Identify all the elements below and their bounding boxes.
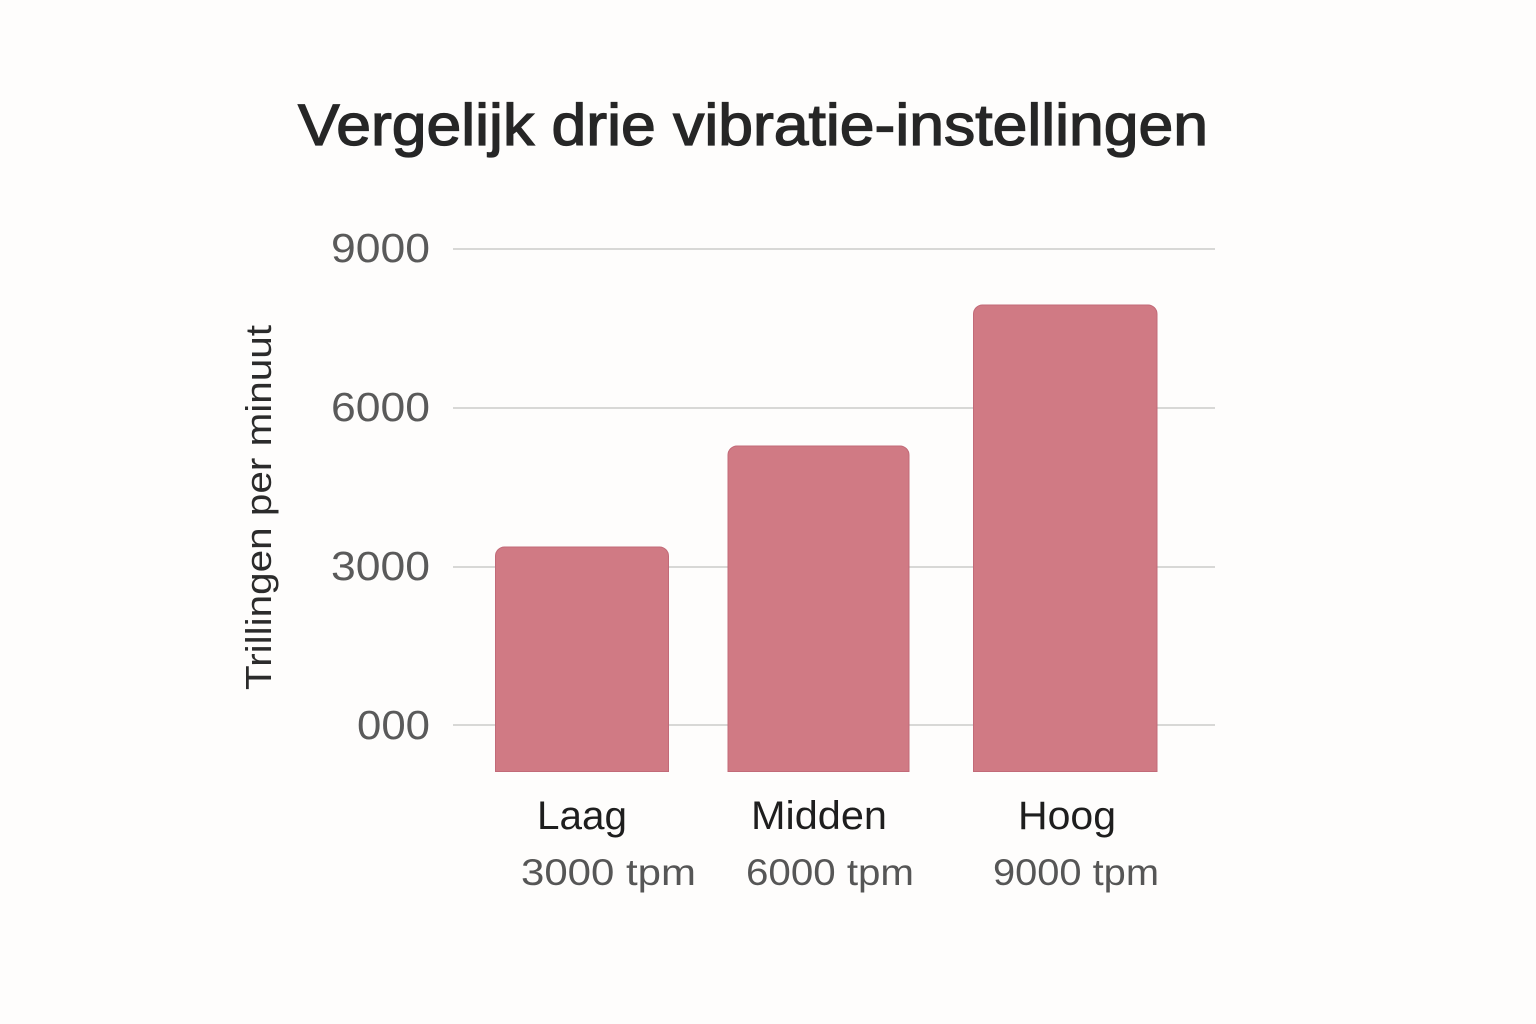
y-axis tick labels: 6000 [331,384,430,430]
y-axis tick labels: 000 [357,702,430,748]
value labels: 6000 tpm [746,852,914,893]
value labels: 9000 tpm [993,852,1159,893]
value labels [521,852,1159,893]
y-axis tick labels: 9000 [331,225,430,271]
category labels: Midden [751,794,887,838]
y-axis tick labels [331,225,430,748]
bar: Laag [496,547,668,772]
category labels: Hoog [1018,794,1116,838]
bar: Midden [728,446,909,772]
bar: Hoog [974,305,1157,772]
value labels: 3000 tpm [521,852,696,893]
title: Vergelijk drie vibratie-instellingen [298,93,1208,158]
y-axis title: Trillingen per minuut [238,325,279,690]
y-axis tick labels: 3000 [331,543,430,589]
bars [496,305,1157,772]
category labels: Laag [537,794,627,838]
category labels [537,794,1116,838]
